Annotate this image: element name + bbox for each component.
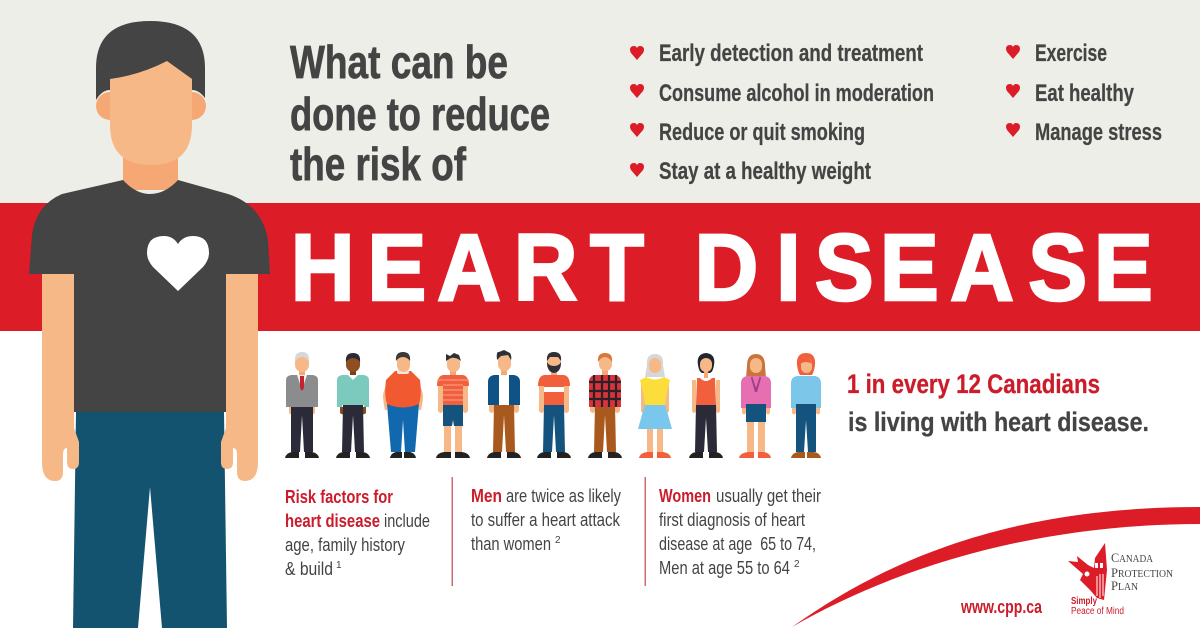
text block: women [659, 486, 821, 578]
top background panel [0, 0, 1200, 203]
text block: risk factors: age, family history [285, 535, 405, 555]
red swoosh [792, 507, 1200, 627]
text block: men: than women [471, 534, 551, 554]
divider [644, 477, 646, 586]
list: prevention tips, first column: Consume alcohol in moderation [659, 80, 934, 107]
text block: risk factors: heart disease [285, 511, 380, 531]
logo: Canada Protection Plan: Peace of Mind [1071, 606, 1124, 617]
list: prevention tips, second column: Exercise [1035, 40, 1107, 67]
red banner [0, 203, 1200, 331]
logo: Canada Protection Plan: PLAN [1111, 578, 1138, 593]
text block: women: first diagnosis of heart [659, 510, 805, 530]
person: woman in orange tank top [689, 353, 723, 458]
logo: Canada Protection Plan [1068, 543, 1173, 617]
title: What can be [290, 36, 508, 88]
person: woman in light blue sweater [791, 353, 821, 458]
text block: risk factors: & build [285, 559, 333, 579]
list: prevention tips, first column: Early detection and treatment [659, 40, 923, 67]
title: the risk of [290, 138, 466, 190]
person: older man in suit [285, 352, 319, 458]
logo: Canada Protection Plan: CANADA [1111, 550, 1154, 565]
text block: risk factors [285, 487, 430, 579]
text block: men: are twice as likely [506, 486, 621, 506]
icon: maple leaf [1068, 543, 1107, 600]
text block: women: 2 [794, 559, 800, 570]
statistic callout [847, 369, 1149, 437]
icon: white heart on shirt [147, 236, 209, 291]
list: prevention tips, second column: Eat healthy [1035, 80, 1134, 107]
main figure: man with heart t-shirt [29, 21, 270, 628]
person: older woman in yellow top and blue skirt [638, 354, 672, 458]
list: prevention tips, first column [630, 40, 934, 185]
title: done to reduce [290, 88, 550, 140]
person: man in navy jacket [487, 350, 521, 458]
text block: risk factors: Risk factors for [285, 487, 393, 507]
title [290, 36, 550, 190]
text block: men: to suffer a heart attack [471, 510, 621, 530]
row of eleven people [285, 350, 821, 458]
website link: www.cpp.ca [960, 597, 1043, 617]
person: man in plaid shirt [588, 353, 622, 458]
person: young man in striped t-shirt [436, 353, 470, 458]
person: bearded man in red and white shirt [537, 352, 571, 458]
list: prevention tips, second column [1006, 40, 1162, 146]
person: heavier man in orange shirt [383, 352, 423, 458]
statistic callout: is living with heart disease. [848, 407, 1149, 437]
divider [452, 477, 453, 586]
text block: men: 2 [555, 535, 561, 546]
text block: women: usually get their [716, 486, 821, 506]
banner heading: HEART DISEASE [291, 215, 1153, 321]
text block: men [471, 486, 621, 554]
text block: risk factors: 1 [336, 560, 342, 571]
list: prevention tips, second column: Manage stress [1035, 119, 1162, 146]
person: man in teal sweater [336, 353, 370, 458]
text block: women: disease at age 65 to 74, [659, 534, 816, 554]
text block: risk factors: include [384, 511, 430, 531]
list: prevention tips, first column: Reduce or quit smoking [659, 119, 865, 146]
logo: Canada Protection Plan: PROTECTION [1111, 565, 1173, 580]
statistic callout: 1 in every 12 Canadians [847, 369, 1100, 399]
text block: women: Women [659, 486, 711, 506]
text block: women: Men at age 55 to 64 [659, 558, 790, 578]
person: woman in pink jacket [739, 354, 771, 458]
text block: men: Men [471, 486, 502, 506]
logo: Canada Protection Plan: Simply [1071, 596, 1097, 607]
list: prevention tips, first column: Stay at a healthy weight [659, 158, 871, 185]
